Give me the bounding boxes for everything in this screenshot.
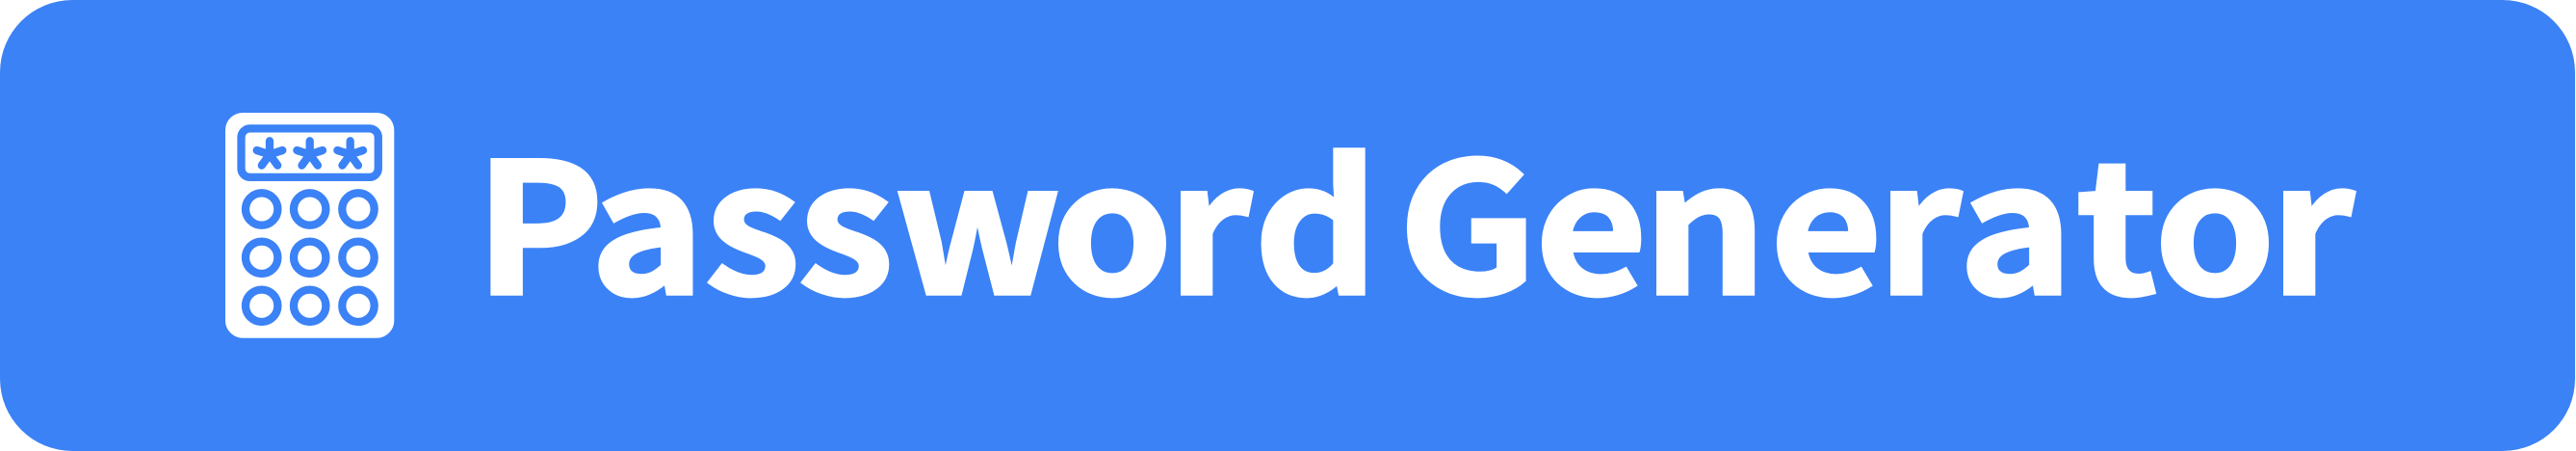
password asterisks <box>257 141 363 166</box>
keypad buttons <box>246 193 375 322</box>
password display field <box>241 128 378 177</box>
icon: password keypad <box>225 113 394 338</box>
keypad body <box>225 113 394 338</box>
title: Password Generator <box>475 85 2355 347</box>
